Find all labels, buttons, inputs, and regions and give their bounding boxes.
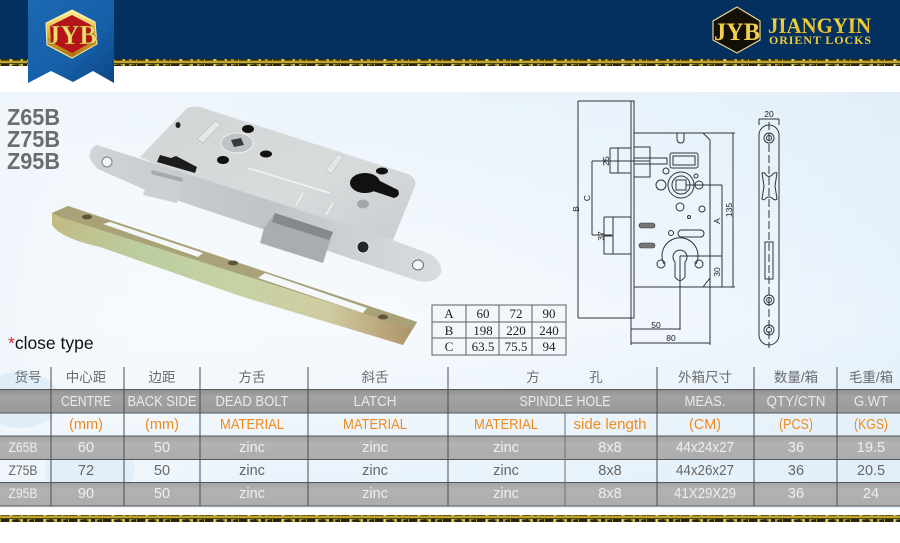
- row: Z65B: 36: [788, 440, 804, 456]
- row: Z75B: zinc: [493, 463, 519, 479]
- model names: Z75B: [7, 126, 60, 152]
- latch: [143, 170, 183, 203]
- row: Chinese headers: 外箱尺寸: [678, 370, 732, 385]
- dimension labels: [571, 156, 734, 343]
- row: English headers: LATCH: [354, 393, 396, 410]
- ribbon with logo: [28, 0, 114, 83]
- row: English headers: MEAS.: [684, 393, 726, 410]
- row: Z65B: 8x8: [598, 440, 622, 456]
- dimension table: 60: [476, 306, 490, 321]
- dead bolt: [260, 213, 333, 263]
- row: Z65B: 60: [78, 440, 94, 456]
- row: English headers: DEAD BOLT: [216, 393, 288, 410]
- row: units: MATERIAL: [474, 416, 538, 433]
- panel: product background: [0, 92, 900, 508]
- technical drawing: side view: [571, 101, 735, 345]
- row: Chinese headers: 方: [526, 370, 540, 385]
- row: Z65B: zinc: [362, 440, 388, 456]
- company subtitle: ORIENT LOCKS: [769, 33, 871, 47]
- dimension labels: 80: [666, 333, 676, 343]
- row: Z75B: [8, 462, 885, 479]
- row: Z65B: [8, 439, 885, 456]
- row: Chinese headers: 货号: [14, 369, 42, 385]
- dimension labels: C: [582, 195, 592, 201]
- row: Z95B: zinc: [362, 486, 388, 502]
- product photo: strike plate: [52, 206, 417, 345]
- dimension labels: 25: [601, 156, 611, 166]
- row: English headers: [61, 393, 888, 410]
- row: Z75B: Z75B: [8, 462, 38, 478]
- icon: JYB hexagon right: [713, 7, 760, 53]
- row: Chinese headers: 数量/箱: [774, 370, 818, 385]
- row: units: (KGS): [854, 416, 888, 433]
- row: Z75B: 72: [78, 463, 94, 479]
- row: Z95B: 8x8: [598, 486, 622, 502]
- icon: JYB hexagon right: JYB: [714, 19, 760, 46]
- row: units: [69, 416, 888, 433]
- dimension labels: 135: [724, 203, 734, 217]
- model names: [7, 104, 60, 174]
- row: Z95B: [8, 485, 879, 502]
- dimension labels: A: [712, 218, 722, 224]
- row: units: side length: [574, 416, 646, 433]
- row: units: MATERIAL: [220, 416, 284, 433]
- model names: Z65B: [7, 104, 60, 130]
- row: Z95B: 36: [788, 486, 804, 502]
- row: Z95B: 90: [78, 486, 94, 502]
- icon: JYB hexagon badge: JYB: [47, 20, 97, 50]
- row: English headers: SPINDLE HOLE: [520, 393, 610, 410]
- row: English headers: BACK SIDE: [128, 393, 196, 410]
- row: Chinese headers: 方舌: [238, 370, 266, 385]
- row: Z95B: 24: [863, 486, 879, 502]
- row: Z95B: 50: [154, 486, 170, 502]
- company logo: [713, 7, 871, 53]
- row: units: (CM): [689, 416, 721, 433]
- row: Chinese headers: 孔: [589, 370, 603, 385]
- note: close type: *close type: [8, 333, 94, 353]
- row: Z95B: Z95B: [8, 485, 38, 501]
- row: Chinese headers: 中心距: [66, 370, 106, 385]
- dimension labels: B: [571, 206, 581, 212]
- row: Z75B: zinc: [362, 463, 388, 479]
- dimension table: 90: [542, 306, 556, 321]
- dimension table: 198: [473, 323, 493, 338]
- row: Z95B: 41X29X29: [674, 486, 736, 502]
- row: Z75B: 36: [788, 463, 804, 479]
- dimension table: 72: [510, 306, 522, 321]
- product photo: mortise lock: [90, 107, 441, 282]
- row: Z65B: 44x24x27: [676, 440, 734, 456]
- row: Z65B: zinc: [493, 440, 519, 456]
- gold decorative band: bottom: [0, 515, 900, 522]
- dimension table: B: [445, 323, 454, 338]
- dimension labels: 37: [596, 231, 606, 241]
- row: Chinese headers: 斜舌: [362, 370, 388, 385]
- row: Chinese headers: [14, 369, 893, 385]
- row: units: (mm): [69, 416, 103, 433]
- dimension table: C: [445, 339, 453, 354]
- dimension table: 63.5: [472, 339, 494, 354]
- technical drawing: faceplate front view: [759, 109, 779, 348]
- row: English headers: G.WT: [854, 393, 888, 410]
- row: Z65B: Z65B: [8, 439, 38, 455]
- row: Z75B: 50: [154, 463, 170, 479]
- dimension table: 75.5: [505, 339, 527, 354]
- row: Z65B: 50: [154, 440, 170, 456]
- row: English headers: CENTRE: [61, 393, 111, 410]
- dimension table: 240: [539, 323, 559, 338]
- row: Chinese headers: 毛重/箱: [849, 370, 893, 385]
- row: Z95B: zinc: [239, 486, 265, 502]
- dimension table: 94: [542, 339, 556, 354]
- technical drawing: faceplate front view: 20: [764, 109, 774, 119]
- dimension labels: 50: [651, 320, 661, 330]
- row: Z75B: 44x26x27: [676, 463, 734, 479]
- dimension table: A: [444, 306, 454, 321]
- row: Chinese headers: 边距: [148, 370, 176, 385]
- faceplate: [90, 145, 441, 282]
- row: Z75B: 8x8: [598, 463, 622, 479]
- row: units: (mm): [145, 416, 179, 433]
- dimension table: 220: [506, 323, 526, 338]
- table row backgrounds: [0, 367, 900, 506]
- spec table: [0, 367, 900, 506]
- row: units: (PCS): [779, 416, 813, 433]
- row: Z75B: zinc: [239, 463, 265, 479]
- header bar: [0, 0, 900, 60]
- dimension table: [432, 305, 566, 355]
- row: English headers: QTY/CTN: [766, 393, 826, 410]
- dimension labels: 30: [712, 267, 722, 277]
- row: units: MATERIAL: [343, 416, 407, 433]
- row: Z65B: zinc: [239, 440, 265, 456]
- model names: Z95B: [7, 148, 60, 174]
- row: Z95B: zinc: [493, 486, 519, 502]
- row: Z65B: 19.5: [857, 440, 885, 456]
- row: Z75B: 20.5: [857, 463, 885, 479]
- company name: JIANGYIN: [768, 13, 871, 38]
- lock body: [140, 107, 415, 240]
- gold decorative band: top: [0, 59, 900, 66]
